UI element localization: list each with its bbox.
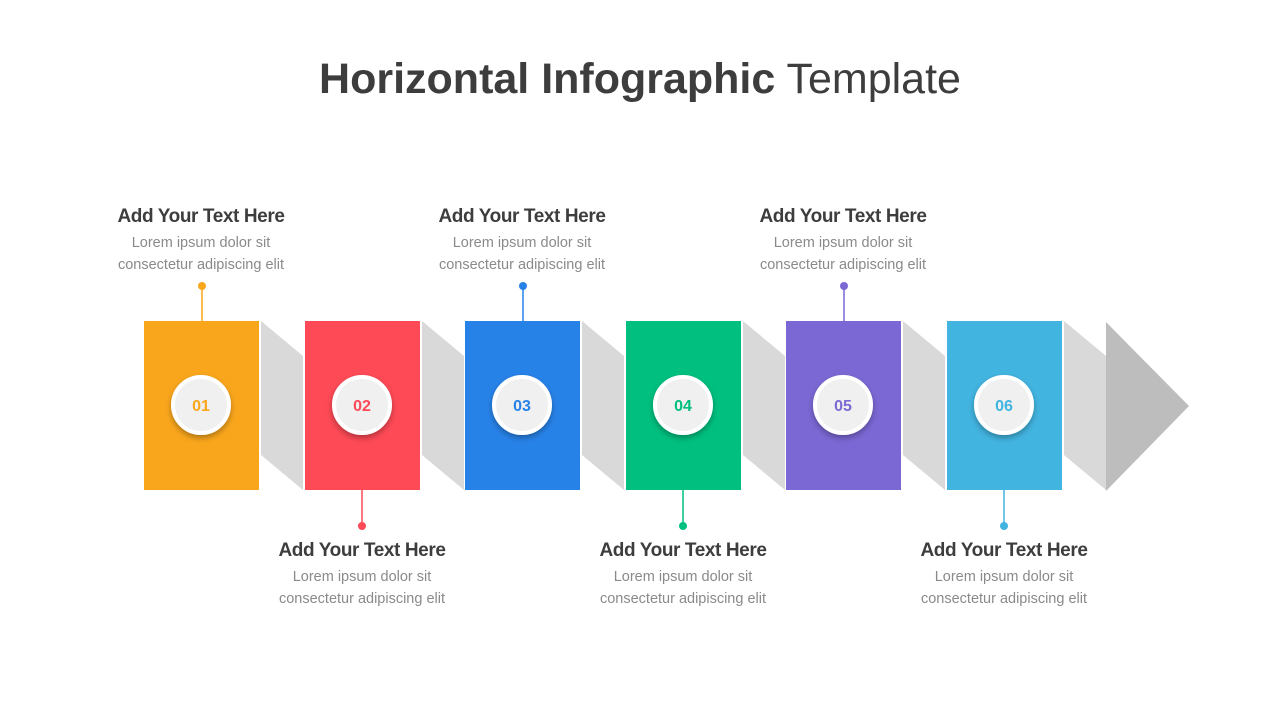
text 01: consectetur adipiscing elit <box>118 257 284 273</box>
text 06: Lorem ipsum dolor sit <box>935 569 1073 585</box>
step 03 <box>465 282 580 490</box>
text 06 <box>920 540 1088 607</box>
step 05 <box>786 282 901 490</box>
step 06 <box>947 321 1062 530</box>
text 03: Add Your Text Here <box>438 206 606 227</box>
text 04: Add Your Text Here <box>599 540 766 561</box>
text 04: consectetur adipiscing elit <box>600 591 766 607</box>
text 03 <box>438 206 606 273</box>
step 02: 02 <box>353 398 371 415</box>
connectors <box>261 321 1106 490</box>
text 03: Lorem ipsum dolor sit <box>453 235 591 251</box>
step 04: 04 <box>674 398 692 415</box>
text 06: consectetur adipiscing elit <box>921 591 1087 607</box>
text 06: Add Your Text Here <box>920 540 1088 561</box>
text 05 <box>759 206 926 273</box>
text 05: Add Your Text Here <box>759 206 926 227</box>
step 06: 06 <box>995 398 1013 415</box>
step 02 <box>305 321 420 530</box>
text 03: consectetur adipiscing elit <box>439 257 605 273</box>
text 01: Add Your Text Here <box>117 206 284 227</box>
arrow head <box>1106 322 1189 491</box>
text 04 <box>599 540 766 607</box>
step 03: 03 <box>513 398 531 415</box>
text 04: Lorem ipsum dolor sit <box>614 569 752 585</box>
step 01: 01 <box>192 398 210 415</box>
title: Horizontal Infographic Template <box>319 55 961 103</box>
step 05: 05 <box>834 398 852 415</box>
text 01 <box>117 206 284 273</box>
text 05: Lorem ipsum dolor sit <box>774 235 912 251</box>
step 01 <box>144 282 259 490</box>
text 01: Lorem ipsum dolor sit <box>132 235 270 251</box>
step 04 <box>626 321 741 530</box>
text 02 <box>278 540 446 607</box>
text 05: consectetur adipiscing elit <box>760 257 926 273</box>
text 02: Lorem ipsum dolor sit <box>293 569 431 585</box>
text 02: consectetur adipiscing elit <box>279 591 445 607</box>
text 02: Add Your Text Here <box>278 540 446 561</box>
